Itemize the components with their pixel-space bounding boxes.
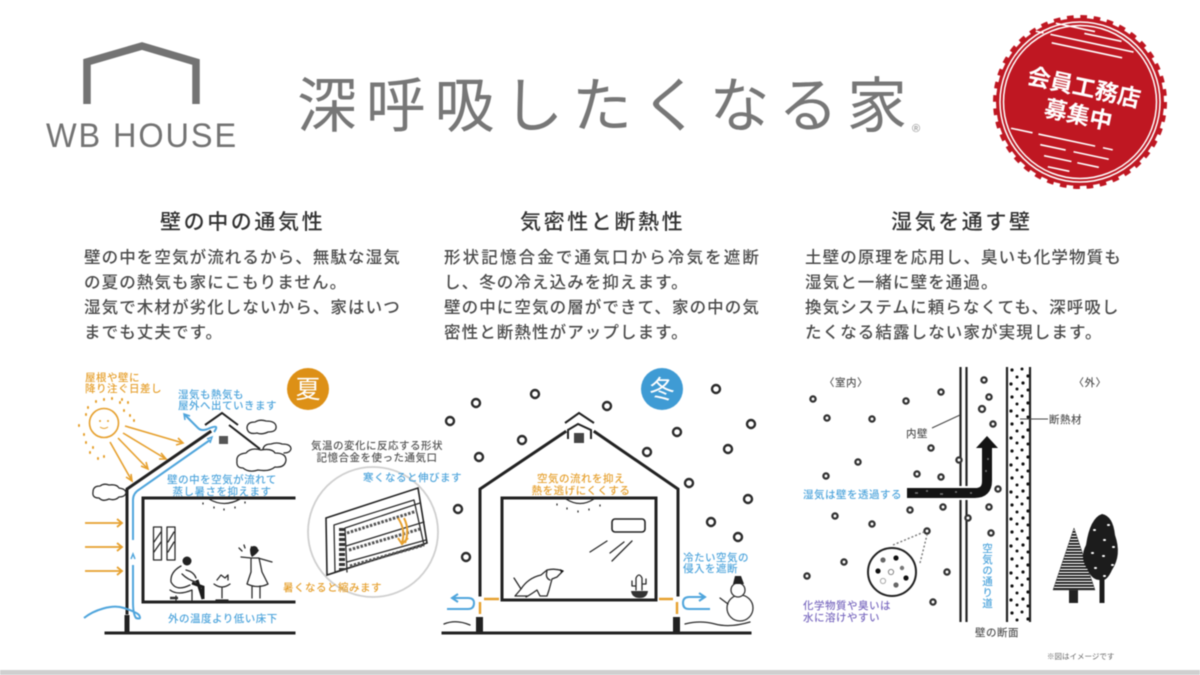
air flow label: 湿気も熱気も bbox=[178, 388, 244, 401]
moisture label: 湿気は壁を透過する bbox=[803, 488, 902, 501]
inner wall label: 内壁 bbox=[906, 427, 928, 440]
panel: moisture permeable wall bbox=[803, 211, 1122, 661]
logo: WB HOUSE bbox=[46, 46, 238, 155]
vent drawing bbox=[326, 488, 427, 575]
heading: 気密性と断熱性 bbox=[520, 211, 685, 234]
interior: table bbox=[214, 575, 230, 600]
body text: 湿気で木材が劣化しないから、家はいつ bbox=[84, 297, 401, 317]
air flow label: 屋外へ出ていきます bbox=[178, 399, 277, 412]
icon: summer badge: 夏 bbox=[295, 376, 321, 404]
main title: 深呼吸したくなる家 bbox=[297, 73, 907, 140]
icon: cactus bbox=[631, 575, 648, 598]
bottom band bbox=[0, 670, 1200, 675]
air conditioner bbox=[590, 519, 645, 561]
chemical label bbox=[803, 599, 891, 624]
underfloor label: 外の温度より低い床下 bbox=[168, 612, 278, 625]
badge: member recruitment bbox=[996, 18, 1164, 186]
particles bbox=[804, 377, 1001, 605]
sun ray arrows bbox=[110, 426, 183, 481]
cold air label bbox=[683, 551, 749, 575]
badge: member recruitment: 募集中 bbox=[1042, 95, 1115, 135]
illustration: vent detail bbox=[283, 439, 462, 597]
air flow label bbox=[178, 388, 277, 412]
body text bbox=[805, 248, 1122, 342]
insulation layer bbox=[1008, 367, 1030, 622]
icon: dog bbox=[514, 569, 564, 597]
logo: WB HOUSE: WB HOUSE bbox=[46, 117, 238, 155]
body text: し、冬の冷え込みを抑えます。 bbox=[444, 273, 689, 292]
airway label: 空気の通り道 bbox=[981, 542, 993, 609]
icon: conifer tree bbox=[1053, 528, 1095, 603]
heat retention label: 熱を逃げにくくする bbox=[532, 484, 630, 497]
badge: member recruitment: 会員工務店 bbox=[1025, 63, 1143, 112]
body text bbox=[444, 248, 760, 342]
illustration: summer house bbox=[79, 368, 329, 633]
cold air label: 冷たい空気の bbox=[683, 551, 749, 564]
heading: 湿気を通す壁 bbox=[891, 211, 1033, 234]
sunlight label: 降り注ぐ日差し bbox=[85, 382, 162, 395]
body text bbox=[84, 247, 401, 342]
icon: round tree bbox=[1083, 514, 1118, 603]
airflow arrow in the wall bbox=[84, 414, 216, 619]
magnifier circle bbox=[308, 467, 438, 597]
sunlight label bbox=[85, 371, 162, 395]
wall lines bbox=[960, 367, 1030, 622]
body text: までも丈夫です。 bbox=[84, 323, 223, 342]
heat retention label: 空気の流れを抑え bbox=[537, 472, 625, 485]
cold air label: 侵入を遮断 bbox=[683, 562, 738, 575]
cold air arrows bbox=[447, 593, 710, 609]
body text: 湿気と一緒に壁を通過。 bbox=[805, 273, 999, 292]
interior: ceiling light bbox=[203, 499, 245, 510]
body text: の夏の熱気も家にこもりません。 bbox=[84, 273, 347, 292]
indoor label: 〈室内〉 bbox=[824, 376, 868, 389]
vent caption: 気温の変化に反応する形状 bbox=[311, 439, 443, 452]
ground drift lines bbox=[444, 622, 750, 626]
cold state label: 寒くなると伸びます bbox=[363, 471, 462, 484]
registered mark: ® bbox=[912, 123, 920, 135]
body text: 換気システムに頼らなくても、深呼吸し bbox=[805, 298, 1120, 317]
icon: summer badge bbox=[287, 368, 329, 410]
outdoor label: 〈外〉 bbox=[1074, 376, 1106, 389]
ceiling light bbox=[557, 499, 600, 512]
wall heat arrows bbox=[85, 519, 122, 575]
clouds bbox=[93, 420, 291, 500]
chemical label: 水に溶けやすい bbox=[803, 611, 880, 624]
icon: winter badge: 冬 bbox=[649, 376, 675, 404]
orange insulation seals bbox=[480, 599, 677, 614]
house outline bbox=[443, 413, 750, 633]
insulation label: 断熱材 bbox=[1049, 413, 1082, 426]
body text: 壁の中を空気が流れるから、無駄な湿気 bbox=[84, 247, 401, 267]
panel: ventilation inside the wall bbox=[79, 211, 462, 633]
wall flow label: 壁の中を空気が流れて bbox=[167, 473, 277, 486]
header bbox=[46, 18, 1164, 186]
interior: seated person bbox=[170, 556, 203, 600]
section label: 壁の断面 bbox=[975, 626, 1019, 639]
footnote: ※図はイメージです bbox=[1047, 652, 1114, 661]
zoom guide lines bbox=[893, 532, 927, 563]
sunlight label: 屋根や壁に bbox=[85, 371, 140, 384]
chemical label: 化学物質や臭いは bbox=[803, 599, 891, 612]
interior: standing person bbox=[239, 545, 272, 598]
inner wall label bbox=[906, 415, 960, 440]
wall flow label: 蒸し暑さを抑えます bbox=[172, 485, 272, 498]
heading: 壁の中の通気性 bbox=[160, 211, 325, 234]
illustration: winter house bbox=[443, 368, 755, 633]
magnified molecule bbox=[868, 548, 916, 596]
insulation label bbox=[1020, 413, 1082, 426]
interior: windows bbox=[154, 527, 175, 560]
snowflakes bbox=[446, 385, 755, 561]
vent caption bbox=[311, 439, 443, 464]
body text: 土壁の原理を応用し、臭いも化学物質も bbox=[805, 248, 1122, 267]
house outline bbox=[106, 413, 294, 633]
icon: winter badge bbox=[641, 368, 683, 410]
icon: sun bbox=[79, 398, 134, 459]
vent caption: 記憶合金を使った通気口 bbox=[316, 451, 438, 464]
wall flow label bbox=[167, 473, 277, 498]
illustration: wall cross-section bbox=[803, 367, 1118, 661]
body text: 密性と断熱性がアップします。 bbox=[444, 322, 689, 342]
body text: 形状記憶合金で通気口から冷気を遮断 bbox=[444, 248, 760, 267]
panel: airtightness and insulation bbox=[443, 211, 760, 633]
icon: snowman bbox=[720, 576, 753, 621]
hot state label: 暑くなると縮みます bbox=[283, 581, 382, 594]
heat retention label bbox=[532, 472, 630, 497]
moisture arrow bbox=[907, 436, 998, 494]
body text: 壁の中に空気の層ができて、家の中の気 bbox=[444, 297, 760, 317]
body text: たくなる結露しない家が実現します。 bbox=[805, 322, 1103, 342]
